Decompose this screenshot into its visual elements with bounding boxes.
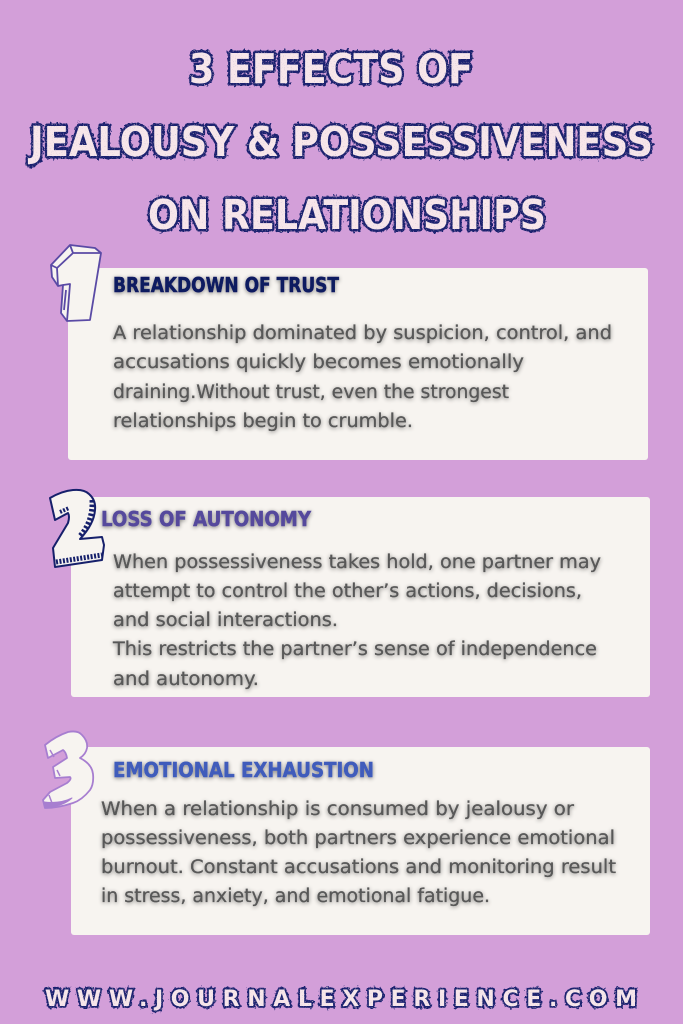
card background 1 (68, 268, 648, 460)
card background 3 (71, 747, 650, 935)
body text 2: When possessiveness takes hold, one partner may (113, 552, 601, 573)
body text 2: This restricts the partner’s sense of independence (112, 639, 597, 660)
body text 3: possessiveness, both partners experience emotional (101, 828, 615, 849)
body text 1: draining.Without trust, even the strongest (113, 382, 509, 403)
body text 1: A relationship dominated by suspicion, control, and (113, 323, 612, 344)
body text 3: in stress, anxiety, and emotional fatigue. (101, 886, 490, 907)
heading: breakdown of trust: BREAKDOWN OF TRUST (113, 273, 339, 297)
body text 1: accusations quickly becomes emotionally (113, 352, 524, 373)
title: ON RELATIONSHIPS (148, 191, 546, 239)
heading: loss of autonomy: LOSS OF AUTONOMY (101, 507, 311, 531)
body text 1 (113, 323, 612, 432)
icon: number 3 (43, 731, 93, 808)
icon: number 1 (51, 245, 101, 321)
card background 2 (71, 497, 650, 697)
body text 2: and autonomy. (113, 669, 259, 690)
title: 3 EFFECTS OF (189, 45, 473, 93)
panel: breakdown of trust (68, 268, 648, 460)
body text 2: and social interactions. (113, 610, 338, 631)
panel: loss of autonomy (71, 497, 650, 697)
icon: number 2 (50, 490, 104, 567)
body text 3: burnout. Constant accusations and monitoring result (101, 857, 616, 878)
body text 2 (112, 552, 601, 690)
footer url: WWW.JOURNALEXPERIENCE.COM (45, 987, 637, 1012)
body text 3: When a relationship is consumed by jealousy or (101, 799, 574, 820)
body text 3 (101, 799, 616, 907)
title (27, 45, 653, 239)
panel: emotional exhaustion (71, 747, 650, 935)
heading: emotional exhaustion: EMOTIONAL EXHAUSTION (113, 758, 374, 782)
body text 2: attempt to control the other’s actions, decisions, (113, 581, 582, 602)
body text 1: relationships begin to crumble. (113, 411, 413, 432)
